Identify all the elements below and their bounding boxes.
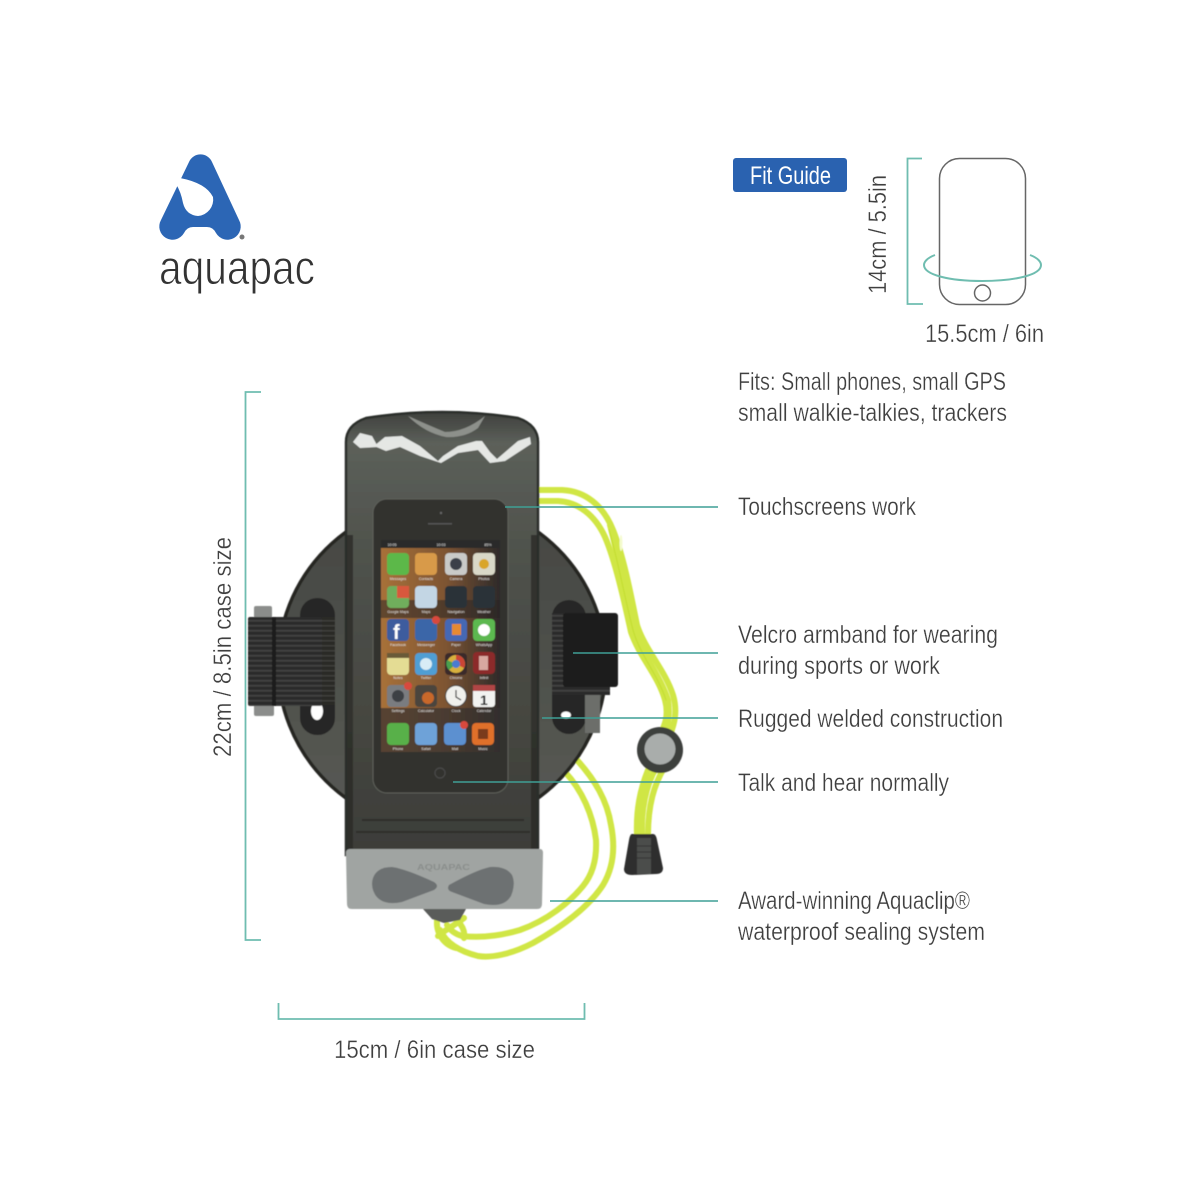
app labels: Messenger <box>417 643 436 647</box>
badge: Fit Guide <box>733 158 847 192</box>
armband right velcro <box>552 613 618 695</box>
app labels: Twitter <box>421 676 432 680</box>
callout: touchscreens work: Touchscreens work <box>738 493 916 521</box>
logo: aquapac <box>159 154 315 295</box>
arm disc <box>278 501 606 829</box>
app labels <box>387 577 492 751</box>
app labels: Camera <box>450 577 462 581</box>
app labels: Infinit <box>480 676 488 680</box>
app labels: Safari <box>421 747 431 751</box>
knob <box>637 727 683 773</box>
fit guide diagram <box>864 158 1044 348</box>
app labels: Facebook <box>390 643 406 647</box>
width label: 15.5cm / 6in <box>925 320 1044 348</box>
app labels: WhatsApp <box>476 643 492 647</box>
product: waterproof armband case <box>248 412 683 957</box>
armband left <box>248 606 335 716</box>
height label: 14cm / 5.5in <box>864 175 892 294</box>
app labels: Settings <box>392 709 405 713</box>
phone: 10:03 <box>436 543 446 547</box>
callout: velcro armband: during sports or work <box>738 652 940 680</box>
app labels: Notes <box>393 676 403 680</box>
app labels: Google Maps <box>387 610 409 614</box>
phone: 85% <box>484 543 492 547</box>
callout: talk and hear: Talk and hear normally <box>738 769 949 797</box>
app labels: Weather <box>477 610 492 614</box>
icon: phone outline <box>940 158 1026 304</box>
app labels: Maps <box>422 610 431 614</box>
callout: Aquaclip: Award-winning Aquaclip® <box>738 887 970 915</box>
phone speaker <box>428 523 452 524</box>
lanyard lower <box>437 760 613 957</box>
app labels: Paper <box>451 643 462 647</box>
callout: velcro armband: Velcro armband for wearing <box>738 621 998 649</box>
app icons: 1 <box>480 692 488 708</box>
phone wallpaper <box>381 548 500 752</box>
phone <box>373 499 508 793</box>
callout: rugged construction: Rugged welded construction <box>738 705 1003 733</box>
top notch <box>408 416 485 437</box>
Aquaclip seal <box>346 849 543 923</box>
icon: aquapac A mark <box>159 154 244 240</box>
girth ellipse <box>924 255 1041 281</box>
case body <box>346 412 538 855</box>
height bracket <box>908 158 923 304</box>
app icons <box>387 553 495 745</box>
app labels: Calculator <box>418 709 435 713</box>
dimension: case width: 15cm / 6in case size <box>334 1036 535 1064</box>
app labels: Contacts <box>419 577 433 581</box>
dimension: case height <box>209 392 261 940</box>
badge: Fit Guide: Fit Guide <box>750 162 831 190</box>
app labels: Phone <box>393 747 403 751</box>
phone: 10:05 <box>388 543 396 547</box>
status bar <box>381 540 500 548</box>
wordmark: aquapac <box>159 242 315 295</box>
app icons: f <box>393 622 400 644</box>
app labels: Music <box>478 747 488 751</box>
callout: Aquaclip <box>550 887 985 946</box>
seal highlight <box>353 433 531 463</box>
app labels: Calendar <box>477 709 492 713</box>
text block: fits: small walkie-talkies, trackers <box>738 399 1007 427</box>
app labels: Clock <box>452 709 461 713</box>
disc slots <box>300 598 600 735</box>
app labels: Chrome <box>450 676 462 680</box>
text block: fits: Fits: Small phones, small GPS <box>738 368 1006 396</box>
clip buttons <box>372 867 437 903</box>
seam <box>350 535 534 850</box>
dimension: case width <box>278 1003 584 1064</box>
dimension: case height: 22cm / 8.5in case size <box>209 537 237 757</box>
text block: fits <box>738 368 1007 427</box>
app labels: Messages <box>390 577 406 581</box>
app labels: Photos <box>478 577 490 581</box>
callout: velcro armband <box>573 621 998 680</box>
app labels: Navigation <box>448 610 464 614</box>
home button <box>435 768 445 778</box>
cord lock <box>624 834 663 875</box>
callout: Aquaclip: waterproof sealing system <box>737 918 985 946</box>
clip brand: AQUAPAC <box>417 863 470 872</box>
app labels: Mail <box>452 747 458 751</box>
lower weld <box>356 820 530 832</box>
tab <box>423 909 466 923</box>
lanyard upper <box>530 490 675 835</box>
